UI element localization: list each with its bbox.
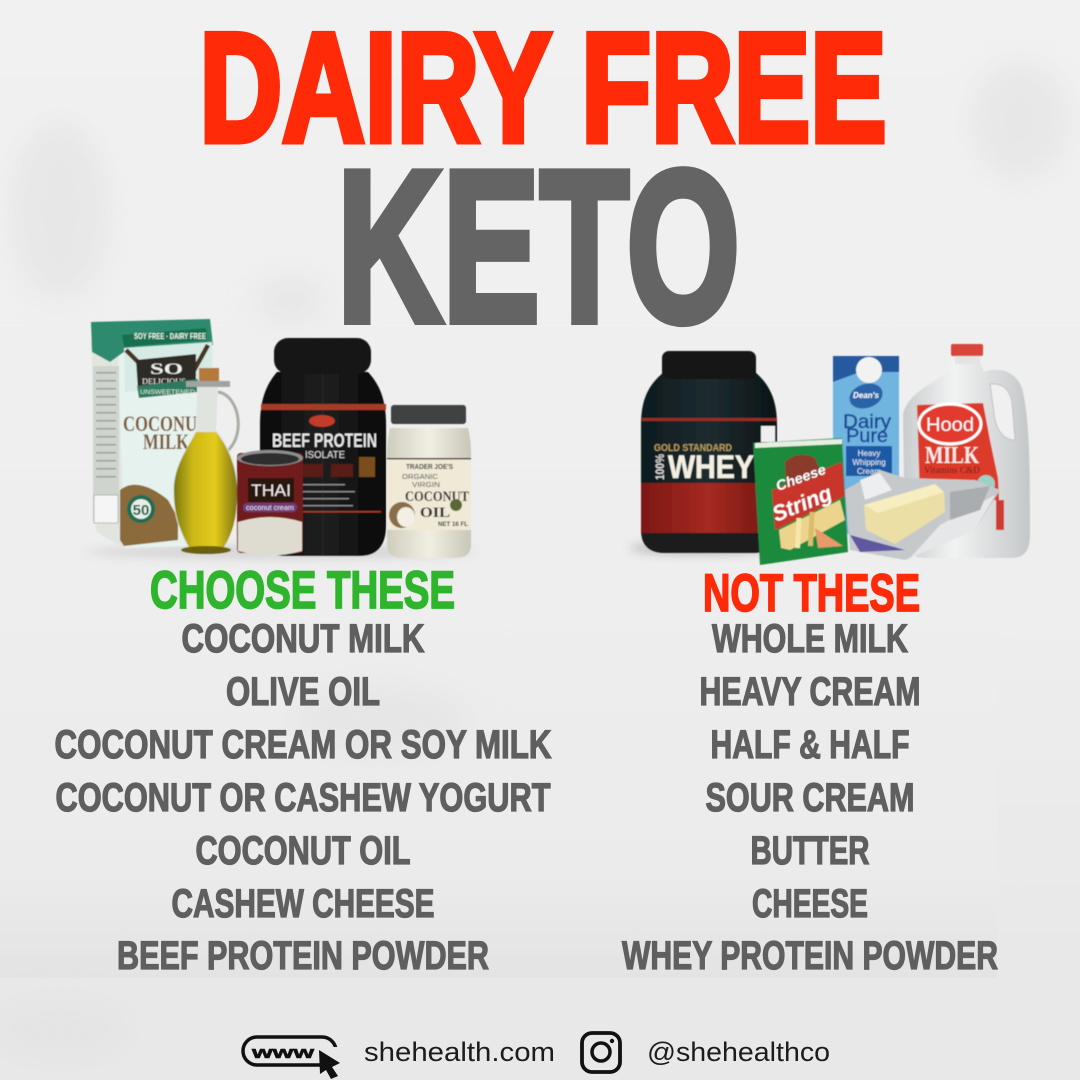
product: coconut milk carton: [91, 319, 215, 548]
product: string cheese pack: Cheese: [774, 461, 828, 494]
product: Gold Standard whey tub: [641, 351, 777, 553]
footer: [243, 1033, 830, 1079]
product: Dairy Pure heavy cream carton: Pure: [846, 426, 888, 447]
list: dairy foods: [622, 617, 998, 978]
list: dairy foods: CHEESE: [752, 882, 868, 926]
panel: not these: [622, 564, 998, 978]
product: Gold Standard whey tub: 100%: [653, 454, 667, 480]
product: coconut milk carton: UNSWEETENED: [140, 389, 195, 396]
product: beef protein jar: ISOLATE: [305, 449, 345, 461]
list: dairy-free foods: COCONUT OIL: [196, 829, 410, 873]
product: milk jug: Vitamins C&D: [924, 466, 980, 476]
list: dairy-free foods: BEEF PROTEIN POWDER: [117, 934, 489, 978]
product: Gold Standard whey tub: GOLD STANDARD: [654, 443, 732, 454]
product group: dairy items to avoid: [630, 344, 1030, 565]
list: dairy-free foods: OLIVE OIL: [226, 670, 380, 714]
product: Dairy Pure heavy cream carton: Dean's: [853, 391, 880, 400]
product: beef protein jar: [260, 338, 386, 556]
list: dairy foods: SOUR CREAM: [706, 776, 914, 820]
heading: not these: NOT THESE: [703, 564, 920, 623]
instagram handle: @shehealthco: [647, 1037, 830, 1067]
heading: choose these: CHOOSE THESE: [150, 561, 455, 620]
list: dairy-free foods: COCONUT CREAM OR SOY MILK: [54, 723, 552, 767]
product: Dairy Pure heavy cream carton: Heavy: [858, 449, 880, 458]
product: coconut milk carton: 50: [133, 502, 149, 519]
product: butter in foil: [845, 470, 1000, 560]
product: coconut oil jar: COCONUT: [405, 489, 469, 505]
product: string cheese pack: [753, 438, 848, 565]
title: Keto: KETO: [337, 125, 740, 367]
product: coconut oil jar: OIL: [420, 505, 450, 521]
product group: dairy-free choices: [85, 319, 475, 558]
list: dairy-free foods: COCONUT MILK: [182, 617, 425, 661]
product: coconut milk carton: DELICIOUS.: [142, 377, 188, 386]
panel: choose these: [54, 561, 552, 978]
list: dairy-free foods: COCONUT OR CASHEW YOGURT: [56, 776, 550, 820]
product: Dairy Pure heavy cream carton: Dairy: [843, 412, 892, 433]
product: beef protein jar: BEEF PROTEIN: [272, 431, 377, 452]
icon: www cursor: [243, 1037, 340, 1079]
product: Thai Kitchen coconut cream can: [237, 450, 303, 556]
product: coconut oil jar: VIRGIN: [412, 480, 440, 489]
list: dairy-free foods: CASHEW CHEESE: [172, 882, 434, 926]
product: coconut milk carton: MILK: [143, 429, 189, 454]
product: coconut milk carton: SO: [150, 361, 183, 378]
icon: www cursor: www: [250, 1043, 315, 1062]
product: olive oil bottle: [173, 368, 238, 554]
product: coconut oil jar: NET 16 FL: [438, 521, 468, 528]
website: shehealth.com: [364, 1037, 555, 1067]
icon: instagram: [582, 1033, 620, 1072]
product: Gold Standard whey tub: WHEY: [668, 449, 754, 485]
product: string cheese pack: String: [769, 480, 836, 527]
product: milk jug: Hood: [926, 415, 974, 436]
product: coconut oil jar: [387, 405, 471, 558]
list: dairy foods: HALF & HALF: [710, 723, 910, 767]
product: coconut milk carton: COCONU: [123, 411, 197, 436]
product: milk jug: [903, 344, 1030, 558]
product: Dairy Pure heavy cream carton: Cream: [857, 467, 881, 476]
product: coconut milk carton: SOY FREE · DAIRY FREE: [134, 331, 206, 341]
list: dairy foods: BUTTER: [750, 829, 870, 873]
product: Dairy Pure heavy cream carton: [833, 356, 899, 534]
list: dairy foods: HEAVY CREAM: [700, 670, 920, 714]
product: coconut oil jar: ORGANIC: [402, 472, 439, 481]
product: Dairy Pure heavy cream carton: Whipping: [852, 458, 886, 467]
product: coconut oil jar: TRADER JOE'S: [406, 462, 453, 471]
list: dairy foods: WHOLE MILK: [712, 617, 908, 661]
product: milk jug: MILK: [925, 443, 979, 469]
product: Thai Kitchen coconut cream can: coconut cream: [246, 505, 294, 512]
list: dairy-free foods: [54, 617, 552, 978]
product: Thai Kitchen coconut cream can: THAI: [251, 481, 291, 500]
